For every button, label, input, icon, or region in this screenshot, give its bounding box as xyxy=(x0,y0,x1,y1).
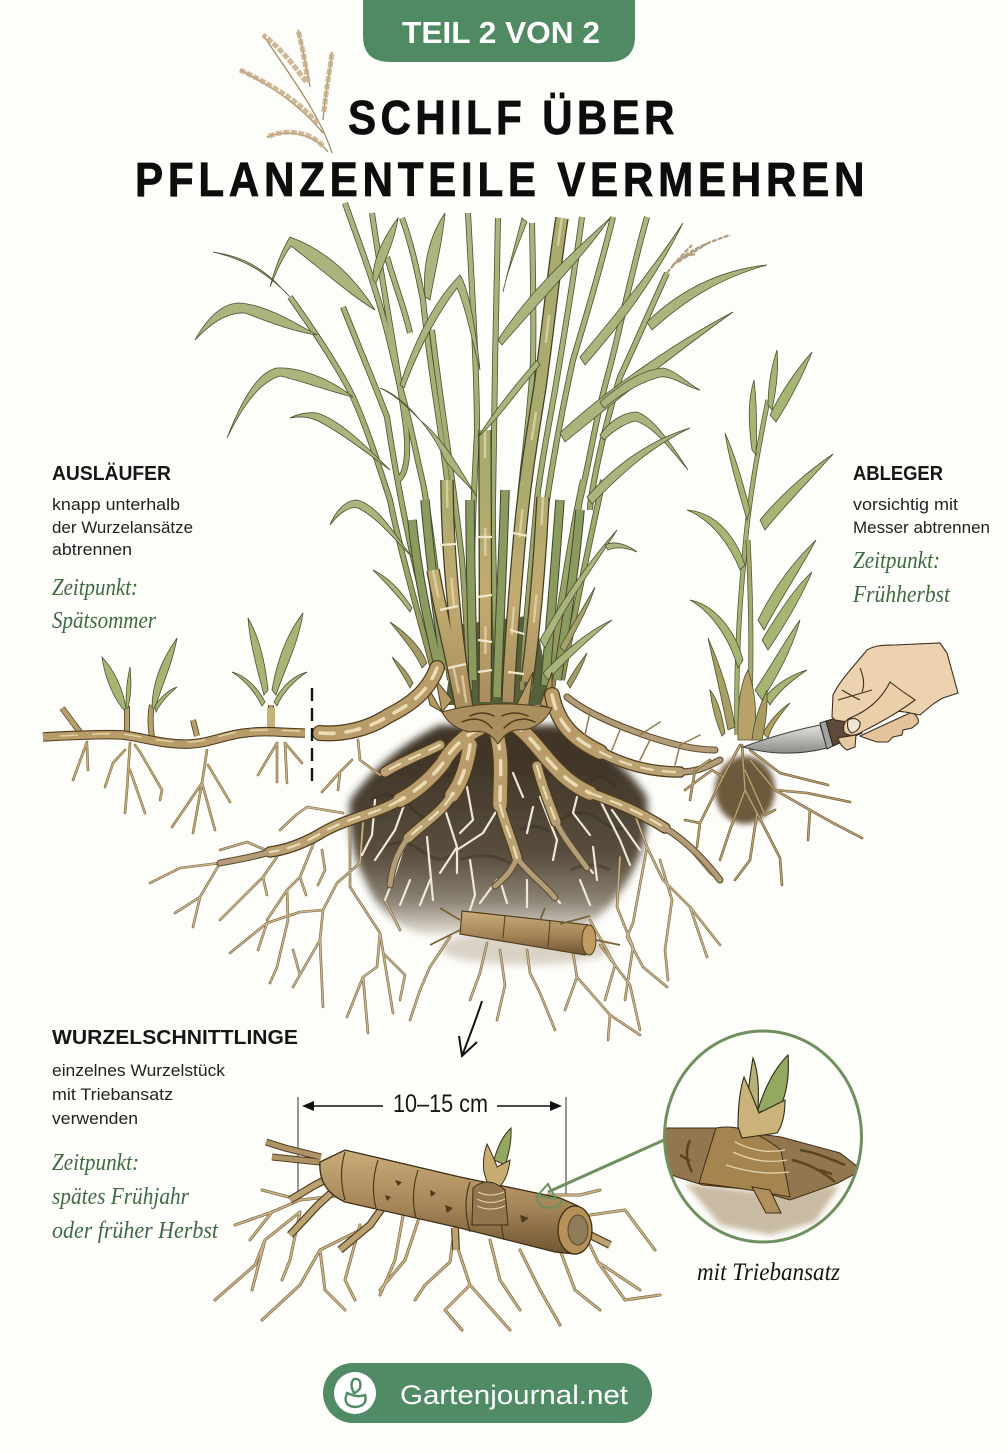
detail root xyxy=(660,1128,862,1200)
top badge: part indicator xyxy=(363,0,635,62)
crown xyxy=(442,704,552,744)
lower fingers xyxy=(860,712,918,742)
back of hand xyxy=(832,643,958,722)
detail collar xyxy=(699,1127,790,1197)
leaves xyxy=(195,213,767,688)
label: Ausläufer: der Wurzelansätze xyxy=(52,518,193,537)
dimension: length 10-15 cm: 10–15 cm xyxy=(393,1090,488,1118)
cut mark xyxy=(311,688,313,782)
illustration: hand holding knife xyxy=(832,643,958,750)
detail shoots xyxy=(738,1055,788,1138)
runner stem xyxy=(43,730,305,744)
label: Ableger: ABLEGER xyxy=(853,463,943,485)
top badge: part indicator: TEIL 2 VON 2 xyxy=(402,15,600,50)
offset roots xyxy=(685,745,862,885)
illustration: main reed clump xyxy=(195,203,767,712)
plume at upper right xyxy=(667,235,730,273)
label: Ausläufer: abtrennen xyxy=(52,540,132,559)
label: Ausläufer xyxy=(52,462,193,634)
seedling stems and thorns xyxy=(62,705,271,738)
arrow: down to root cutting xyxy=(459,1001,482,1056)
label: Wurzelschnittlinge: WURZELSCHNITTLINGE xyxy=(52,1027,298,1049)
icon: reed plume beside title xyxy=(240,30,332,153)
title: SCHILF ÜBER xyxy=(348,90,675,145)
stems xyxy=(290,203,667,710)
runner rootlets xyxy=(73,740,380,833)
label: Ausläufer: Zeitpunkt: xyxy=(52,575,138,601)
illustration: fine roots of main plant xyxy=(150,668,720,1040)
footer badge: Gartenjournal.net: Gartenjournal.net xyxy=(400,1380,629,1410)
basal sheaths xyxy=(424,672,552,712)
node rings xyxy=(440,533,528,674)
detail circle: shoot magnified xyxy=(660,1030,862,1242)
cutting end xyxy=(558,1206,592,1254)
label: Ableger: Messer abtrennen xyxy=(853,518,990,537)
thumb xyxy=(844,682,915,735)
label: Wurzelschnittlinge xyxy=(52,1027,298,1244)
cutting rootlets xyxy=(215,1190,660,1330)
roots on soil xyxy=(362,773,640,910)
footer badge: Gartenjournal.net xyxy=(323,1363,652,1423)
dark shadow behind stems xyxy=(445,615,552,705)
detail shadow xyxy=(685,1183,840,1235)
illustration: knife xyxy=(743,713,862,753)
illustration: soil under main plant xyxy=(350,725,648,965)
runner plant with cut mark xyxy=(43,613,380,833)
icon: logo xyxy=(334,1372,376,1414)
label: Ableger xyxy=(852,463,990,608)
label: Ausläufer: Spätsommer xyxy=(52,608,157,634)
seedling leaves xyxy=(102,613,307,712)
offset shoots xyxy=(737,400,768,735)
label: Wurzelschnittlinge: spätes Frühjahr xyxy=(52,1184,190,1210)
dimension: length 10-15 cm xyxy=(298,1090,566,1200)
offset soil xyxy=(715,756,775,824)
roots outside soil xyxy=(150,807,720,1040)
illustration: offset plant with roots xyxy=(685,350,862,885)
label: Ausläufer: AUSLÄUFER xyxy=(52,462,172,485)
caption: mit Triebansatz: mit Triebansatz xyxy=(697,1259,840,1286)
title xyxy=(135,90,865,207)
label: Ableger: Zeitpunkt: xyxy=(853,548,940,574)
main roots xyxy=(320,668,600,805)
label: Ableger: Frühherbst xyxy=(852,582,951,608)
title: PFLANZENTEILE VERMEHREN xyxy=(135,152,865,207)
label: Ausläufer: knapp unterhalb xyxy=(52,495,180,514)
illustration: root cutting xyxy=(215,1128,660,1330)
label: Wurzelschnittlinge: verwenden xyxy=(52,1109,138,1128)
upper right rootlets xyxy=(585,712,700,765)
label: Wurzelschnittlinge: einzelnes Wurzelstück xyxy=(52,1061,225,1080)
cutting body xyxy=(320,1150,578,1254)
label: Wurzelschnittlinge: Zeitpunkt: xyxy=(52,1150,139,1176)
cutting shoot xyxy=(472,1128,511,1225)
label: Wurzelschnittlinge: mit Triebansatz xyxy=(52,1085,173,1104)
green pointer from cutting to detail xyxy=(537,1140,664,1208)
label: Wurzelschnittlinge: oder früher Herbst xyxy=(52,1218,219,1244)
label: Ableger: vorsichtig mit xyxy=(853,495,958,514)
illustration: cut root piece in soil xyxy=(430,908,620,955)
